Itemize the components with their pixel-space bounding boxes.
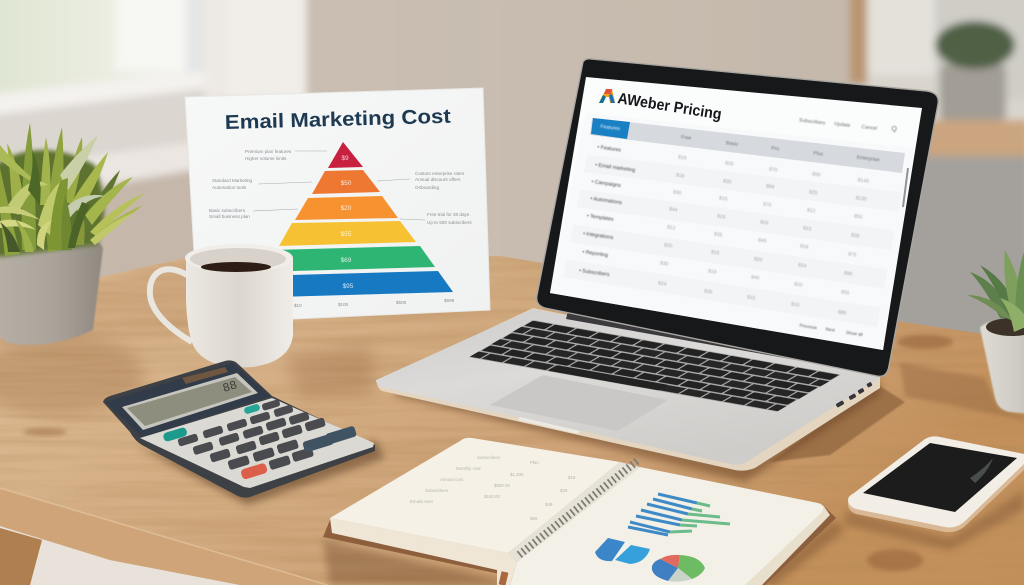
table text: $75 [848,251,857,259]
chart: blue and green bars [628,494,730,535]
chart: cost pyramid tiers: $55 [341,231,352,238]
text: notebook left page lines: $19 [568,475,576,480]
table text: $99 [812,171,821,179]
table text: • Automations [590,196,623,206]
table text: $35 [714,231,723,239]
table text: • Features [597,144,622,154]
table text: $44 [669,206,678,214]
chart: cost pyramid tiers: $50 [341,180,352,187]
text: pyramid side labels: Free trial for 30 days [427,212,470,217]
table text: $30 [723,178,732,186]
succulent pot [980,318,1024,415]
table text: $49 [758,237,767,245]
table text: Update [834,121,851,129]
table text: $24 [798,262,807,270]
notebook right page [510,467,823,585]
table text: $25 [809,189,818,197]
table text: $20 [664,242,673,250]
succulent leaves [967,250,1024,332]
text: notebook left page lines: Annual cost [440,477,464,482]
table text: $15 [803,225,812,233]
text: notebook left page lines: $150.00 [484,494,500,499]
text: notebook left page lines: $29 [560,488,568,493]
text: notebook left page lines: Subscribers [425,488,449,493]
coffee surface [201,262,271,272]
table text: $29 [760,219,769,227]
calculator display: 88 [221,378,239,396]
plant pot [0,243,103,345]
plant leaves [0,123,145,256]
text: notebook left page lines: $69 [530,516,538,521]
chart: cost pyramid tiers: $9 [341,155,349,162]
heading: AWeber Pricing: AWeber Pricing [616,90,723,123]
table front edge and leg [0,487,330,585]
text: notebook left page lines: $1,200 [510,472,524,477]
heading: Email Marketing Cost: Email Marketing Cost [225,106,451,134]
table text: $19 [708,268,717,276]
table text: $16 [676,172,685,180]
calculator keys [162,399,357,480]
table text: • Templates [586,213,614,223]
table text: • Subscribers [579,268,610,278]
laptop [376,59,938,471]
text: pyramid side labels: Basic subscribers [209,208,246,213]
table text: $19 [717,213,726,221]
table text: $16 [800,243,809,251]
text: notebook left page lines: Plan [530,460,539,465]
chart: cost pyramid tiers: $95 [343,283,354,290]
spiral binding [519,461,637,555]
table text: $39 [851,232,860,240]
table text: $15 [719,195,728,203]
table text: • Integrations [583,231,614,241]
text: notebook left page lines: $49 [545,502,553,507]
icon: small succulent plant [967,250,1024,415]
bookmark loop [502,572,505,585]
chart: pie [652,555,705,582]
icon: potted grass plant [0,123,145,345]
table text: Show all [845,330,863,337]
text: notebook left page lines: Monthly cost [456,466,481,471]
notebook cover and page edges [323,470,836,585]
table text: • Reporting [582,249,608,259]
chart: cost pyramid tiers: $69 [341,257,352,264]
table text: $10 [791,301,800,309]
text: pyramid side labels: Small business plan [209,214,250,219]
phone screen [863,443,1017,512]
chart: blue shield shapes [595,538,650,564]
notebook with charts [323,438,836,585]
table text: Free [681,134,692,142]
calculator solar panel [182,367,228,384]
laptop lid [537,59,938,376]
table text [579,117,898,337]
table text: $55 [841,289,850,297]
table text: Enterprise [856,155,880,163]
icon: desk calculator [103,360,375,498]
table text: Q [891,126,898,133]
table text: Basic [726,140,739,148]
pricing table rows [563,154,902,327]
text: pyramid side labels: Automation tools [212,185,247,190]
table text: Features [600,124,621,132]
panel: Email Marketing Cost pyramid card [185,88,490,322]
wooden table top [0,250,1024,585]
table text: $20 [794,281,803,289]
table text: $40 [751,274,760,282]
table header bar [590,118,905,173]
calculator body [103,360,375,498]
blue active tab [591,118,630,139]
text: pyramid side labels: Annual discount offers [415,177,461,182]
table text: $19 [678,154,687,162]
table text: $12 [807,207,816,215]
laptop screen: AWeber pricing page [550,77,922,350]
chart: cost pyramid tiers [240,142,453,298]
table text: $70 [763,201,772,209]
background wall and window [0,0,1024,390]
table text: $149 [857,177,869,185]
icon: smartphone [848,436,1024,532]
table text: $15 [711,249,720,257]
table text: $24 [658,280,667,288]
text: pyramid side labels: $100 [338,302,349,307]
text: notebook left page lines [410,455,576,521]
text: notebook left page lines: Subscribers [477,455,501,460]
text: pyramid side labels [209,149,472,308]
table text: • Email marketing [595,162,636,174]
table text: $35 [704,288,713,296]
table text: $12 [667,224,676,232]
text: pyramid side labels: $500 [396,300,407,305]
table text: $20 [754,256,763,264]
chart: cost pyramid tiers: $20 [341,205,352,212]
table text: Pro [771,146,780,152]
calculator display [122,373,258,430]
table text: $15 [747,294,756,302]
table text: $79 [769,166,778,174]
text: notebook left page lines: $900.00 [494,483,510,488]
table text: • Campaigns [591,179,622,189]
text: pyramid side labels: $10 [294,303,302,308]
cast shadows on table [0,335,1024,585]
laptop keyboard [469,320,841,412]
laptop hinge [566,311,833,366]
table text: Next [825,326,836,333]
text: pyramid side labels: Standard Marketing [212,178,253,183]
laptop side ports [836,382,873,408]
table text: Subscribers [799,117,826,127]
text: pyramid side labels: Custom enterprise rates [415,171,465,176]
table text: Plus [813,150,824,158]
laptop base [376,308,880,471]
text: pyramid side labels: Up to 500 subscribers [427,220,472,225]
plant foliage mass [0,150,104,257]
table text: $50 [854,213,863,221]
table text: $29 [725,160,734,168]
text: pyramid side labels: Higher volume limits [245,156,287,161]
table text: $30 [673,189,682,197]
table text: Cancel [861,124,877,132]
table text: $30 [660,260,669,268]
text: notebook left page lines: Emails sent [410,499,433,504]
text: pyramid side labels: Premium plan features [245,149,292,154]
notebook spine gutter [508,462,640,562]
icon: white coffee mug [150,244,293,367]
table text: $130 [855,195,867,203]
text: pyramid side labels: Onboarding [415,185,439,190]
table text: $69 [766,183,775,191]
table text: $90 [844,270,853,278]
table text: Previous [799,323,818,330]
table text: $80 [838,309,847,317]
text: pyramid side labels: $999 [444,298,455,303]
scrollbar [903,168,908,207]
notebook left page [330,438,620,553]
logo: rainbow A [599,89,615,103]
